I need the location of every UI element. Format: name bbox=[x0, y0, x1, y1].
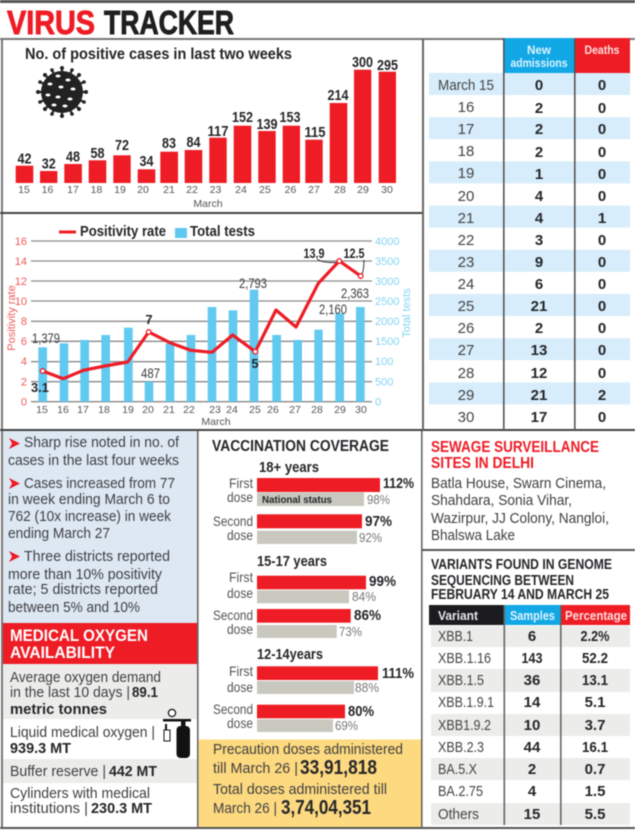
left axis: 4 bbox=[21, 356, 27, 368]
left axis: 16 bbox=[15, 236, 27, 248]
panel: sewage surveillance sites: Shahdara, Sonia Vihar, bbox=[431, 493, 572, 509]
bullet text: Three districts reported bbox=[24, 549, 170, 565]
group: 18+ years: First bbox=[229, 475, 253, 491]
x axis labels: 22 bbox=[183, 404, 195, 416]
header: new admissions bbox=[504, 38, 574, 73]
bars bbox=[16, 70, 396, 183]
table rows: 0 bbox=[598, 365, 606, 382]
x axis labels: 21 bbox=[163, 184, 175, 196]
bar value labels: 72 bbox=[115, 137, 129, 154]
table rows: 52.2 bbox=[582, 650, 608, 667]
bar value labels: 84 bbox=[186, 134, 201, 151]
x axis labels: 18 bbox=[91, 184, 102, 196]
group: 18+ years: dose bbox=[227, 527, 253, 543]
x axis labels bbox=[36, 404, 367, 428]
x axis labels: 25 bbox=[259, 184, 271, 196]
x axis labels: 27 bbox=[289, 404, 301, 416]
x axis labels: March bbox=[201, 416, 231, 428]
table header: Percentage bbox=[565, 609, 627, 623]
callout: doses administered bbox=[199, 740, 421, 827]
bullet text: in week ending March 6 to bbox=[8, 492, 170, 508]
panel: genome variants table bbox=[429, 557, 630, 825]
title bbox=[7, 4, 234, 41]
oxygen stats: Cylinders with medical bbox=[10, 786, 150, 802]
bar value labels: 58 bbox=[90, 145, 104, 162]
x axis labels: 30 bbox=[355, 404, 367, 416]
table rows: 21 bbox=[458, 210, 474, 227]
table rows: 21 bbox=[531, 298, 547, 315]
x axis labels: 19 bbox=[122, 404, 134, 416]
table rows: 13.1 bbox=[582, 672, 608, 689]
table rows: 143 bbox=[522, 650, 542, 667]
left axis: 0 bbox=[21, 396, 27, 408]
right axis: 500 bbox=[375, 376, 393, 388]
bullet text: more than 10% positivity bbox=[8, 567, 163, 583]
table rows: 2 bbox=[535, 144, 543, 161]
heading band bbox=[3, 623, 197, 664]
table rows: 24 bbox=[458, 276, 474, 293]
panel: sewage surveillance sites: Batla House, Swarn Cinema, bbox=[431, 476, 606, 492]
table rows: 0 bbox=[598, 409, 606, 426]
positivity rate line bbox=[40, 259, 364, 379]
group: 18+ years: Second bbox=[213, 513, 253, 529]
callout: doses administered: March 26 | bbox=[213, 801, 277, 817]
table rows: 27 bbox=[458, 342, 474, 359]
oxygen stats: metric tonnes bbox=[10, 702, 107, 718]
left axis: 10 bbox=[15, 296, 27, 308]
group: 12-14 years: dose bbox=[227, 679, 253, 695]
table rows: 13 bbox=[531, 342, 547, 359]
x axis labels: 20 bbox=[137, 184, 149, 196]
x axis labels: 26 bbox=[285, 184, 296, 196]
legend: Positivity rate bbox=[80, 224, 166, 240]
panel: vaccination coverage bbox=[199, 438, 421, 827]
x axis labels: 23 bbox=[209, 404, 221, 416]
data labels: 3.1 bbox=[31, 380, 49, 395]
oxygen stats: Average oxygen demand bbox=[10, 670, 161, 686]
x axis labels: 28 bbox=[334, 184, 346, 196]
bullet text: Cases increased from 77 bbox=[24, 476, 175, 492]
table rows: 30 bbox=[458, 409, 474, 426]
table rows: 19 bbox=[458, 165, 474, 182]
table rows: Others bbox=[438, 806, 479, 823]
table rows: 0 bbox=[598, 254, 606, 271]
right axis: 2500 bbox=[375, 296, 399, 308]
group: 15-17 years: 15-17 years bbox=[257, 554, 327, 570]
title: TRACKER bbox=[104, 4, 234, 41]
table rows: 25 bbox=[458, 298, 474, 315]
legend bbox=[59, 224, 255, 240]
right axis: 4000 bbox=[375, 236, 399, 248]
left axis: 12 bbox=[15, 276, 27, 288]
header: new admissions: admissions bbox=[510, 56, 568, 70]
group: 18+ years: 92% bbox=[359, 531, 382, 545]
data labels bbox=[31, 246, 369, 395]
table rows: 9 bbox=[535, 254, 543, 271]
title: VIRUS bbox=[7, 4, 95, 41]
right axis: 3500 bbox=[375, 256, 399, 268]
x axis labels: 17 bbox=[67, 184, 79, 196]
bullet text: Sharp rise noted in no. of bbox=[24, 435, 180, 451]
x axis labels: 27 bbox=[308, 184, 320, 196]
bullet arrows bbox=[9, 438, 20, 562]
header: new admissions: New bbox=[527, 43, 552, 57]
x axis labels bbox=[18, 184, 393, 210]
group: 15-17 years: 73% bbox=[339, 625, 362, 639]
x axis labels: 16 bbox=[57, 404, 69, 416]
table rows: BA.2.75 bbox=[438, 783, 483, 800]
bullet text: ending March 27 bbox=[8, 526, 110, 542]
table rows: 29 bbox=[458, 387, 474, 404]
table rows: 0 bbox=[598, 276, 606, 293]
table rows: 36 bbox=[524, 672, 540, 689]
bar value labels: 295 bbox=[377, 57, 398, 74]
table rows: 12 bbox=[531, 365, 547, 382]
group: 15-17 years: dose bbox=[227, 621, 253, 637]
bar value labels: 34 bbox=[140, 153, 154, 170]
table header: Variant bbox=[438, 609, 479, 623]
x axis labels: 30 bbox=[381, 184, 393, 196]
data labels: 2,160 bbox=[319, 302, 347, 317]
panel: medical oxygen availability bbox=[3, 623, 197, 817]
table rows: 1 bbox=[598, 210, 606, 227]
table header bbox=[429, 605, 630, 625]
oxygen stats: 230.3 MT bbox=[91, 801, 152, 817]
group: 12-14 years: First bbox=[229, 663, 253, 679]
x axis labels: 20 bbox=[142, 404, 154, 416]
data labels: 7 bbox=[145, 312, 153, 327]
table rows: 17 bbox=[458, 121, 474, 138]
x axis labels: 28 bbox=[311, 404, 323, 416]
group: 12-14 years: 80% bbox=[348, 704, 374, 720]
table rows: 0 bbox=[598, 298, 606, 315]
x axis labels: 18 bbox=[98, 404, 110, 416]
group: 18+ years: dose bbox=[227, 489, 253, 505]
group: 18+ years bbox=[213, 460, 414, 545]
panel: sewage surveillance sites: SITES IN DELHI bbox=[431, 455, 534, 472]
table rows: 3.7 bbox=[585, 717, 605, 734]
x axis labels: 25 bbox=[249, 404, 261, 416]
heading band: MEDICAL OXYGEN bbox=[10, 626, 148, 645]
table rows: 22 bbox=[458, 232, 474, 249]
table rows: 14 bbox=[524, 694, 541, 711]
table header: Samples bbox=[510, 609, 555, 623]
data labels: 5 bbox=[251, 356, 259, 371]
table rows: 18 bbox=[458, 143, 474, 160]
table rows: 44 bbox=[524, 739, 541, 756]
left axis: 6 bbox=[21, 336, 27, 348]
table rows: XBB.1.16 bbox=[438, 650, 491, 667]
left axis: 14 bbox=[15, 256, 27, 268]
table rows: XBB.2.3 bbox=[438, 739, 484, 756]
table rows: BA.5.X bbox=[438, 761, 477, 778]
table rows: 0.7 bbox=[585, 761, 605, 778]
table rows: 2 bbox=[535, 100, 543, 117]
table rows: 6 bbox=[535, 276, 543, 293]
group: 15-17 years: 84% bbox=[352, 590, 376, 604]
x axis labels: 23 bbox=[210, 184, 221, 196]
group: 15-17 years: 86% bbox=[354, 608, 381, 624]
oxygen stats: 89.1 bbox=[132, 685, 158, 701]
table rows: 10 bbox=[524, 717, 540, 734]
oxygen stats: 442 MT bbox=[109, 764, 157, 780]
table rows: 2 bbox=[528, 761, 536, 778]
right axis: 100 bbox=[375, 356, 393, 368]
x axis labels: 22 bbox=[186, 184, 198, 196]
callout: doses administered: Precaution doses administered bbox=[213, 742, 403, 758]
panel: positive cases bar chart bbox=[16, 46, 398, 210]
chart heading: No. of positive cases in last two weeks bbox=[25, 46, 292, 63]
right axis bbox=[375, 236, 413, 408]
table rows: 26 bbox=[458, 320, 474, 337]
bar value labels: 214 bbox=[328, 87, 349, 104]
oxygen stats bbox=[10, 670, 161, 817]
table rows: 0 bbox=[598, 100, 606, 117]
bullet text: 762 (10x increase) in week bbox=[8, 509, 172, 525]
table rows: 2 bbox=[535, 121, 543, 138]
data labels: 12.5 bbox=[344, 246, 365, 261]
table rows: 16.1 bbox=[582, 739, 608, 756]
group: 18+ years: National status bbox=[262, 495, 332, 506]
table rows: 0 bbox=[598, 188, 606, 205]
bar value labels: 48 bbox=[66, 148, 80, 166]
table rows: 4 bbox=[528, 783, 537, 800]
table rows: 6 bbox=[528, 628, 536, 645]
right axis: 3000 bbox=[375, 276, 399, 288]
group: 12-14 years: 69% bbox=[335, 719, 358, 733]
group: 18+ years: 98% bbox=[367, 493, 390, 507]
data labels: 487 bbox=[141, 366, 160, 381]
oxygen stats: Liquid medical oxygen | bbox=[10, 725, 155, 741]
right axis: 0 bbox=[375, 396, 381, 408]
panel: positivity rate and total tests chart bbox=[6, 224, 413, 428]
group: 12-14 years bbox=[213, 647, 414, 733]
panel: daily admissions and deaths table bbox=[429, 38, 630, 430]
x axis labels: 29 bbox=[334, 404, 346, 416]
oxygen stats: 939.3 MT bbox=[10, 741, 71, 757]
bar value labels: 300 bbox=[352, 54, 373, 71]
table rows: 16 bbox=[458, 99, 474, 116]
callout: doses administered: till March 26 | bbox=[213, 761, 298, 777]
group: 15-17 years: Second bbox=[213, 607, 253, 623]
table rows: 20 bbox=[458, 188, 474, 205]
x axis labels: 16 bbox=[42, 184, 53, 196]
table rows: 17 bbox=[531, 409, 547, 426]
x axis labels: March bbox=[193, 198, 223, 210]
x axis labels: 29 bbox=[357, 184, 369, 196]
table rows: 0 bbox=[598, 77, 606, 94]
group: 18+ years: 97% bbox=[365, 514, 392, 530]
data labels: 2,363 bbox=[341, 286, 369, 301]
table rows: 0 bbox=[598, 144, 606, 161]
table rows bbox=[438, 77, 606, 426]
group: 15-17 years: 99% bbox=[369, 574, 396, 590]
left axis: 2 bbox=[21, 376, 27, 388]
bullet text: rate; 5 districts reported bbox=[8, 582, 158, 598]
heading bbox=[431, 557, 612, 603]
group: 18+ years: 112% bbox=[383, 476, 414, 492]
x axis labels: 21 bbox=[163, 404, 175, 416]
legend: Total tests bbox=[190, 224, 255, 240]
x axis labels: 26 bbox=[267, 404, 279, 416]
oxygen stats: institutions | bbox=[10, 801, 88, 817]
left axis: Positivity rate bbox=[6, 285, 18, 351]
table rows bbox=[438, 628, 610, 823]
group: 12-14 years: 111% bbox=[382, 666, 414, 682]
x axis labels: 19 bbox=[114, 184, 126, 196]
bullet text bbox=[8, 435, 180, 616]
callout: doses administered: 3,74,04,351 bbox=[281, 797, 371, 819]
table rows: 0 bbox=[598, 320, 606, 337]
oxygen stats: Buffer reserve | bbox=[10, 764, 106, 780]
bar value labels: 152 bbox=[232, 109, 253, 126]
panel: sewage surveillance sites: Wazirpur, JJ Colony, Nangloi, bbox=[431, 511, 609, 527]
x axis labels: 24 bbox=[235, 184, 247, 196]
panel: sewage surveillance sites: SEWAGE SURVEILLANCE bbox=[431, 439, 599, 456]
heading band: AVAILABILITY bbox=[10, 643, 116, 662]
table rows: 1.5 bbox=[585, 783, 605, 800]
right axis: Total tests bbox=[401, 288, 413, 338]
bar value labels: 42 bbox=[18, 150, 32, 168]
panel: key points bbox=[3, 431, 197, 623]
callout: doses administered: 33,91,818 bbox=[300, 757, 377, 779]
right axis: 1500 bbox=[375, 336, 399, 348]
table rows: 5.1 bbox=[585, 694, 605, 711]
panel: sewage surveillance sites: Bhalswa Lake bbox=[431, 528, 515, 544]
heading: VACCINATION COVERAGE bbox=[212, 438, 389, 455]
group: 15-17 years bbox=[213, 554, 396, 639]
table rows: 21 bbox=[531, 387, 547, 404]
bullet text: between 5% and 10% bbox=[8, 600, 140, 616]
group: 12-14 years: 12-14years bbox=[257, 647, 323, 663]
left axis: 8 bbox=[21, 316, 27, 328]
callout: doses administered: Total doses administered till bbox=[213, 782, 387, 798]
table rows: 0 bbox=[598, 166, 606, 183]
data labels: 13.9 bbox=[304, 246, 324, 261]
table rows: XBB.1.5 bbox=[438, 672, 484, 689]
table rows: 2 bbox=[535, 320, 543, 337]
right axis: 2000 bbox=[375, 316, 399, 328]
table rows: 4 bbox=[535, 188, 544, 205]
group: 12-14 years: 88% bbox=[355, 681, 379, 695]
icon: virus bbox=[36, 66, 88, 118]
bar value labels bbox=[18, 54, 398, 172]
panel: sewage surveillance sites bbox=[431, 439, 609, 544]
x axis labels: 15 bbox=[18, 184, 30, 196]
group: 12-14 years: dose bbox=[227, 715, 253, 731]
x axis labels: 24 bbox=[226, 404, 238, 416]
table rows: XBB.1.9.1 bbox=[438, 694, 494, 711]
oxygen stats: in the last 10 days | bbox=[10, 685, 130, 701]
group: 18+ years: 18+ years bbox=[259, 460, 319, 476]
group: 12-14 years: Second bbox=[213, 701, 253, 717]
table rows: 15 bbox=[524, 806, 540, 823]
group: 15-17 years: First bbox=[229, 569, 253, 585]
table rows: 28 bbox=[458, 365, 474, 382]
table rows: 23 bbox=[458, 254, 474, 271]
header: deaths: Deaths bbox=[584, 43, 620, 57]
table rows: 4 bbox=[535, 210, 544, 227]
table rows: 2 bbox=[598, 387, 606, 404]
table rows: 2.2% bbox=[580, 628, 610, 645]
x axis labels: 17 bbox=[77, 404, 89, 416]
data labels: 1,379 bbox=[32, 331, 60, 346]
table rows: 0 bbox=[598, 342, 606, 359]
bar value labels: 83 bbox=[162, 135, 176, 152]
table rows: March 15 bbox=[438, 77, 494, 94]
group: 15-17 years: dose bbox=[227, 585, 253, 601]
table rows: 3 bbox=[535, 232, 543, 249]
bullet text: cases in the last four weeks bbox=[8, 453, 179, 469]
bar value labels: 115 bbox=[304, 124, 326, 141]
left axis bbox=[6, 236, 27, 408]
bar value labels: 32 bbox=[42, 156, 56, 172]
table rows: XBB.1 bbox=[438, 628, 473, 645]
table rows: 5.5 bbox=[585, 806, 605, 823]
table rows: 0 bbox=[598, 121, 606, 138]
x axis labels: 15 bbox=[36, 404, 48, 416]
table rows: 0 bbox=[598, 232, 606, 249]
data labels: 2,793 bbox=[239, 276, 267, 291]
table rows: 0 bbox=[535, 77, 543, 94]
bar value labels: 153 bbox=[280, 109, 300, 126]
table rows: XBB1.9.2 bbox=[438, 717, 491, 734]
total tests bars bbox=[38, 290, 365, 402]
heading: SEQUENCING BETWEEN bbox=[431, 573, 574, 589]
header: deaths bbox=[575, 38, 630, 73]
icon: oxygen cylinder bbox=[163, 709, 191, 758]
bar value labels: 117 bbox=[208, 123, 228, 140]
bar value labels: 139 bbox=[256, 116, 278, 133]
table rows: 1 bbox=[535, 166, 543, 183]
